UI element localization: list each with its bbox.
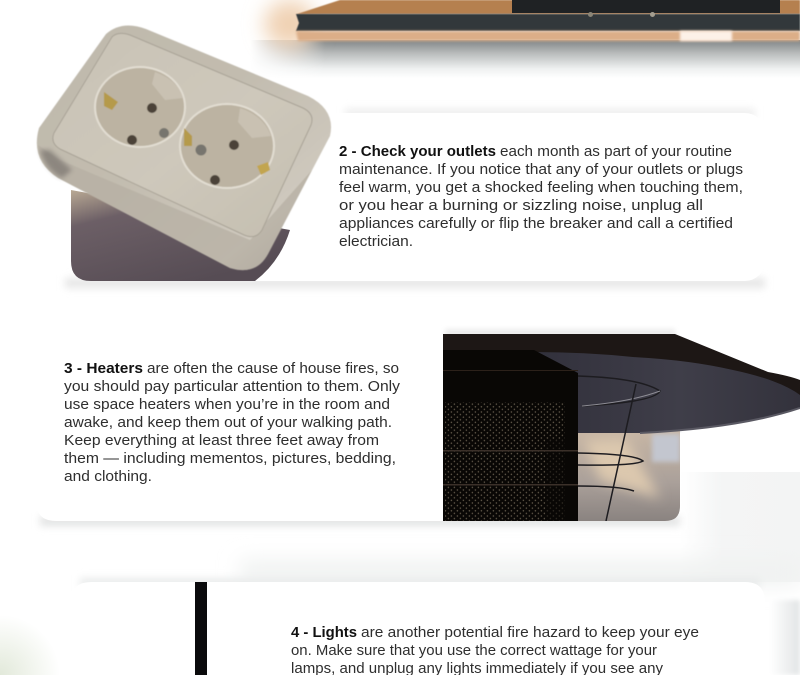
peach glow at left of table <box>264 0 316 48</box>
text: step 4: on. Make sure that you use the correct wattage for your <box>291 643 657 659</box>
text: step 3: them — including mementos, pictures, bedding, <box>64 451 396 467</box>
text: step 2 <box>339 144 743 250</box>
text: step 3: 3 - Heaters <box>64 361 143 377</box>
text: step 2: each month as part of your routine <box>500 144 732 160</box>
left socket <box>95 67 185 147</box>
text: step 3: awake, and keep them out of your walking path. <box>64 415 392 431</box>
text: step 3: Keep everything at least three feet away from <box>64 433 379 449</box>
lamp pole <box>195 582 207 675</box>
text: step 4: 4 - Lights <box>291 625 357 641</box>
text: step 2: feel warm, you get a shocked feeling when touching them, <box>339 180 743 196</box>
heater mesh body <box>443 350 578 521</box>
text: step 3: are often the cause of house fires, so <box>147 361 399 377</box>
text: step 2: 2 - Check your outlets <box>339 144 496 160</box>
heater lamp disc <box>443 334 800 433</box>
text: step 2: maintenance. If you notice that any of your outlets or plugs <box>339 162 743 178</box>
icon: wall outlet <box>37 25 331 270</box>
panel: step 2 outlets <box>37 25 765 281</box>
text: step 2: or you hear a burning or sizzling noise, unplug all <box>339 198 703 214</box>
card 2 background <box>71 113 765 281</box>
wall behind outlet photo <box>71 190 290 281</box>
card 3 background <box>36 334 443 521</box>
card 4 background <box>71 582 765 675</box>
text: step 4: are another potential fire hazard to keep your eye <box>361 625 699 641</box>
text: step 3 <box>64 361 401 485</box>
blurred room backdrop <box>576 425 680 521</box>
text: step 3: and clothing. <box>64 469 152 485</box>
panel: step 3 heaters <box>36 334 800 521</box>
top image: table edge <box>264 0 800 48</box>
right socket <box>180 104 274 188</box>
text: step 2: electrician. <box>339 234 413 250</box>
text: step 4 <box>291 625 699 675</box>
heater wire guard <box>578 376 660 521</box>
text: step 2: appliances carefully or flip the breaker and call a certified <box>339 216 733 232</box>
text: step 3: you should pay particular attention to them. Only <box>64 379 401 395</box>
panel: step 4 lights <box>71 582 765 675</box>
text: step 3: use space heaters when you’re in the room and <box>64 397 390 413</box>
heater photo <box>443 334 800 521</box>
